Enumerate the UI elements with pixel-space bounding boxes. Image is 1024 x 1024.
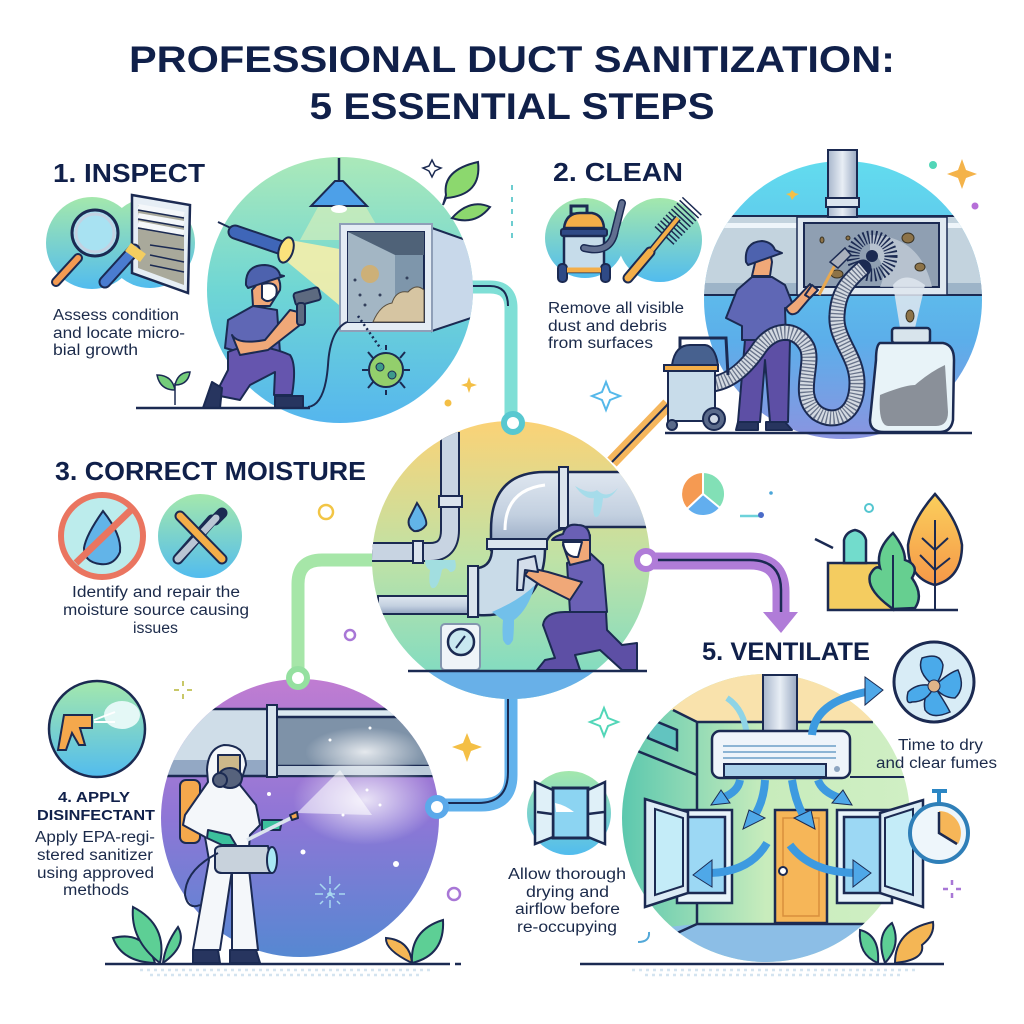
- connector rings: [289, 414, 655, 816]
- text: inspect description: Assess condition: [53, 307, 179, 324]
- text: clean description: [548, 300, 684, 352]
- icon: vent with flashlight: [105, 195, 190, 293]
- panel: step 4 apply disinfectant: [35, 679, 618, 975]
- text: airing description: airflow before: [515, 901, 620, 918]
- text: disinfectant description: stered sanitizer: [37, 847, 153, 864]
- text: moisture description: moisture source causing: [63, 602, 249, 619]
- text: disinfectant description: using approved: [37, 865, 154, 882]
- arrowhead: to step 5: [763, 612, 798, 633]
- title: PROFESSIONAL DUCT SANITIZATION:: [129, 39, 895, 80]
- text: fan caption: [876, 737, 997, 772]
- title: 5 ESSENTIAL STEPS: [310, 86, 714, 127]
- illustration: inspect technician: [203, 265, 321, 408]
- icon: fan: [894, 642, 974, 722]
- icon: wrenches: [158, 494, 242, 578]
- airflow arrows: [693, 677, 883, 887]
- icon: pie chart: [681, 472, 725, 516]
- icon backgrounds: [46, 197, 195, 289]
- panel: step 5 ventilate: [508, 638, 997, 975]
- text: fan caption: Time to dry: [898, 737, 983, 754]
- ground line: [136, 407, 310, 409]
- connector: step 3 to step 4 blue: [440, 695, 511, 805]
- text: moisture description: Identify and repair the: [72, 584, 240, 601]
- icon: ceiling lamp: [311, 158, 367, 213]
- text: airing description: [508, 866, 626, 936]
- text: moisture description: issues: [133, 620, 178, 637]
- text: disinfectant description: Apply EPA-regi-: [35, 829, 155, 846]
- connector: step 3 to step 4: [298, 560, 376, 672]
- icon: leaves: [443, 162, 490, 220]
- heading: correct moisture: 3. CORRECT MOISTURE: [55, 456, 366, 486]
- icon: open window: [527, 771, 611, 855]
- text: disinfectant description: methods: [63, 882, 129, 899]
- icon: sparkles: [592, 159, 978, 410]
- text: clean description: dust and debris: [548, 318, 667, 335]
- text: inspect description: bial growth: [53, 342, 138, 359]
- icon: no water: [61, 495, 143, 577]
- connector: step 2 to step 3: [612, 404, 668, 462]
- illustration: debris jar: [870, 328, 954, 432]
- icon: magnifier: [56, 210, 118, 282]
- ground line: [408, 670, 647, 672]
- illustration: vacuum hose: [692, 268, 863, 418]
- text: clean description: from surfaces: [548, 335, 653, 352]
- divider: [511, 185, 513, 240]
- illustration: hazmat technician: [180, 745, 298, 963]
- window left: [645, 799, 732, 907]
- icon: sparkles: [174, 681, 618, 900]
- illustration: moisture circle: [372, 421, 660, 701]
- heading: inspect: 1. INSPECT: [53, 158, 205, 188]
- window right: [837, 800, 923, 907]
- icon: stopwatch: [910, 791, 968, 862]
- icon: plants: [113, 907, 443, 963]
- accent sparkle: [943, 880, 961, 898]
- connector: step 3 to step 5: [648, 560, 781, 620]
- illustration: ventilate circle: [620, 670, 920, 970]
- icon: duct brush: [618, 198, 702, 282]
- icon: flashlight: [218, 222, 297, 265]
- icon: sprayer: [49, 681, 145, 777]
- text: airing description: re-occupying: [517, 919, 617, 936]
- illustration: clean circle: [700, 150, 990, 439]
- ground line: [580, 963, 944, 965]
- panel: step 1 inspect: [46, 157, 490, 423]
- text: airing description: Allow thorough: [508, 866, 626, 883]
- text: inspect description: [53, 307, 185, 359]
- illustration: inspection circle: [207, 157, 480, 423]
- accent marks: [740, 491, 873, 518]
- panel: step 3 correct moisture: [55, 421, 962, 701]
- text: airing description: drying and: [526, 884, 609, 901]
- text: disinfectant description: [35, 829, 155, 899]
- icon: desk, bottle and plants: [815, 494, 962, 610]
- text: fan caption: and clear fumes: [876, 755, 997, 772]
- accent sparkles: [423, 160, 477, 406]
- dotted ground shadow: [632, 970, 915, 975]
- illustration: clean technician: [726, 241, 818, 430]
- connector: step 1 to step 3: [465, 286, 511, 415]
- accent rings: [319, 505, 355, 640]
- text: clean description: Remove all visible: [548, 300, 684, 317]
- heading: apply disinfectant: [37, 789, 155, 824]
- panel: step 2 clean: [545, 150, 990, 439]
- ground line: [105, 963, 461, 965]
- dotted ground shadow: [140, 970, 430, 975]
- heading: clean: 2. CLEAN: [553, 157, 683, 187]
- icon: plants: [860, 922, 933, 963]
- title: [129, 39, 895, 127]
- icon: vacuum: [545, 198, 625, 282]
- text: inspect description: and locate micro-: [53, 325, 185, 342]
- text: moisture description: [63, 584, 249, 637]
- icon: sprout: [157, 372, 190, 405]
- heading: apply disinfectant: DISINFECTANT: [37, 807, 155, 824]
- illustration: shop vacuum: [664, 338, 728, 430]
- heading: ventilate: 5. VENTILATE: [702, 638, 870, 666]
- heading: apply disinfectant: 4. APPLY: [58, 789, 130, 806]
- illustration: moisture technician: [517, 525, 637, 670]
- illustration: disinfect circle: [161, 679, 439, 957]
- accent swirl: [638, 932, 649, 942]
- ground line: [665, 432, 972, 434]
